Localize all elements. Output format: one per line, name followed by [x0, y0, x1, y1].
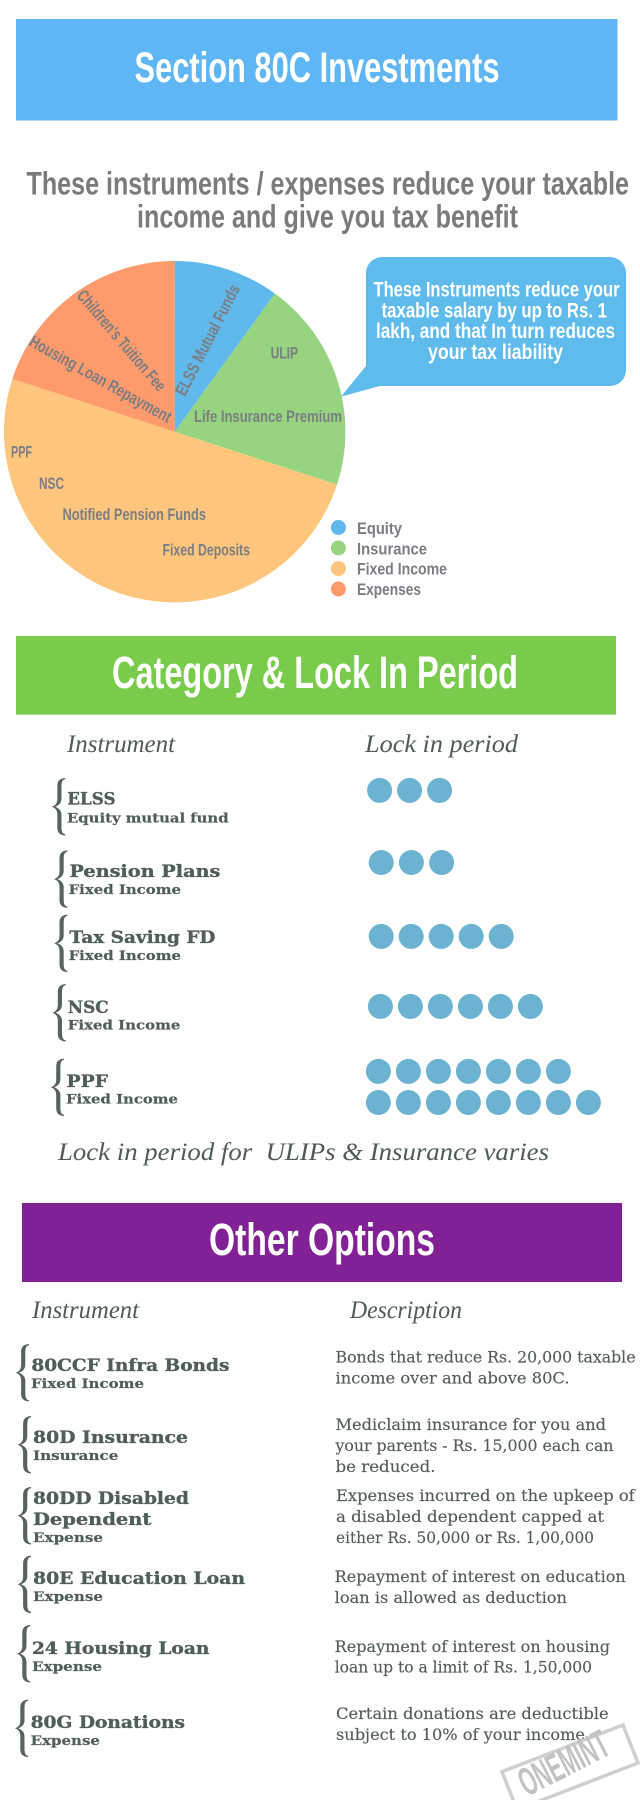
other options banner: Other Options [209, 1214, 435, 1265]
row: ELSS [52, 778, 452, 836]
pie labels [11, 281, 342, 560]
title banner: Section 80C Investments [134, 44, 500, 92]
row: 80E Education Loan: Repayment of interest on education [335, 1567, 626, 1586]
pie labels: Children's Tuition Fee [73, 286, 170, 395]
row: Tax Saving FD: Fixed Income [69, 949, 181, 964]
pie labels: PPF [11, 442, 32, 462]
row: Tax Saving FD [54, 915, 514, 972]
row: PPF: Fixed Income [66, 1093, 178, 1108]
row: 24 Housing Loan [17, 1625, 610, 1682]
row: NSC: Fixed Income [68, 1019, 180, 1034]
pie labels: Housing Loan Repayment [26, 332, 175, 427]
pie labels: ULIP [271, 344, 298, 363]
title banner [16, 19, 618, 120]
category banner [16, 636, 616, 715]
row: NSC [52, 984, 543, 1042]
row: 80E Education Loan: Expense [33, 1590, 103, 1605]
row: 80DD Disabled Dependent [18, 1486, 636, 1547]
row: Pension Plans: Fixed Income [69, 883, 181, 898]
legend [331, 519, 447, 599]
row: 80DD Disabled Dependent: either Rs. 50,000 or Rs. 1,00,000 [336, 1528, 594, 1547]
stamp: ONEMINT [502, 1722, 638, 1800]
pie labels: Notified Pension Funds [62, 505, 206, 524]
pie labels: ELSS Mutual Funds [172, 281, 244, 399]
row: 24 Housing Loan: loan up to a limit of Rs. 1,50,000 [335, 1658, 592, 1677]
row: 80DD Disabled Dependent: 80DD Disabled [33, 1489, 189, 1509]
row: 80D Insurance: be reduced. [336, 1457, 436, 1476]
pie labels: Life Insurance Premium [194, 407, 342, 426]
row: Pension Plans [54, 850, 454, 908]
row: NSC: NSC [68, 998, 109, 1018]
column heading: instrument: Instrument [31, 1297, 140, 1324]
row: Pension Plans: Pension Plans [69, 862, 220, 882]
row: 80E Education Loan: 80E Education Loan [33, 1569, 245, 1589]
row: 80D Insurance: Insurance [33, 1449, 118, 1464]
row: 80D Insurance: Mediclaim insurance for you and [336, 1415, 606, 1434]
legend: Insurance [357, 539, 427, 558]
row: 80D Insurance: your parents - Rs. 15,000 each can [335, 1436, 614, 1455]
row: 80CCF Infra Bonds: income over and above 80C. [336, 1369, 570, 1388]
row: 80G Donations [15, 1700, 609, 1757]
row: 80G Donations: 80G Donations [31, 1713, 185, 1733]
row: 80CCF Infra Bonds [16, 1344, 636, 1402]
pie chart [4, 261, 345, 602]
pie labels: Fixed Deposits [162, 540, 250, 560]
legend: Equity [357, 519, 402, 538]
legend: Fixed Income [357, 560, 447, 578]
row: 80G Donations: subject to 10% of your income [336, 1725, 585, 1744]
row: 80CCF Infra Bonds: Fixed Income [31, 1377, 144, 1392]
row: 80DD Disabled Dependent: Expenses incurred on the upkeep of [336, 1486, 636, 1505]
column heading: instrument: Instrument [66, 731, 176, 758]
pie labels: NSC [39, 474, 64, 493]
row: 24 Housing Loan: Repayment of interest on housing [335, 1637, 610, 1656]
row: PPF: PPF [66, 1072, 108, 1092]
slice: expenses [12, 261, 175, 432]
row: 80DD Disabled Dependent: Expense [33, 1531, 103, 1546]
slice: fixed income [4, 379, 337, 602]
column heading: description: Description [349, 1297, 462, 1324]
subtitle [26, 166, 629, 234]
row: 80G Donations: Expense [31, 1734, 100, 1749]
footnote: Lock in period for ULIPs & Insurance varies [57, 1139, 549, 1166]
legend: Expenses [357, 580, 421, 599]
slice: insurance [175, 294, 345, 484]
row: 24 Housing Loan: Expense [32, 1660, 102, 1675]
row: ELSS: Equity mutual fund [67, 812, 229, 826]
row: 80E Education Loan [18, 1556, 626, 1613]
row: 80E Education Loan: loan is allowed as deduction [335, 1588, 567, 1607]
row: 80CCF Infra Bonds: 80CCF Infra Bonds [31, 1356, 229, 1376]
row: PPF [51, 1059, 601, 1116]
row: 80D Insurance [18, 1415, 614, 1476]
row: 80D Insurance: 80D Insurance [33, 1428, 188, 1448]
row: 80DD Disabled Dependent: a disabled dependent capped at [336, 1507, 605, 1526]
callout bubble [341, 257, 626, 397]
row: 80DD Disabled Dependent: Dependent [33, 1510, 152, 1530]
other options banner [22, 1203, 622, 1282]
column heading: lock in period: Lock in period [364, 731, 519, 758]
row: 80G Donations: Certain donations are deductible [336, 1704, 609, 1723]
slice: equity [175, 261, 275, 432]
subtitle: income and give you tax benefit [137, 198, 518, 234]
row: ELSS: ELSS [67, 790, 116, 810]
callout bubble: your tax liability [428, 341, 563, 364]
row: Tax Saving FD: Tax Saving FD [69, 928, 216, 948]
row: 80CCF Infra Bonds: Bonds that reduce Rs. 20,000 taxable [336, 1348, 636, 1367]
row: 24 Housing Loan: 24 Housing Loan [32, 1639, 209, 1659]
